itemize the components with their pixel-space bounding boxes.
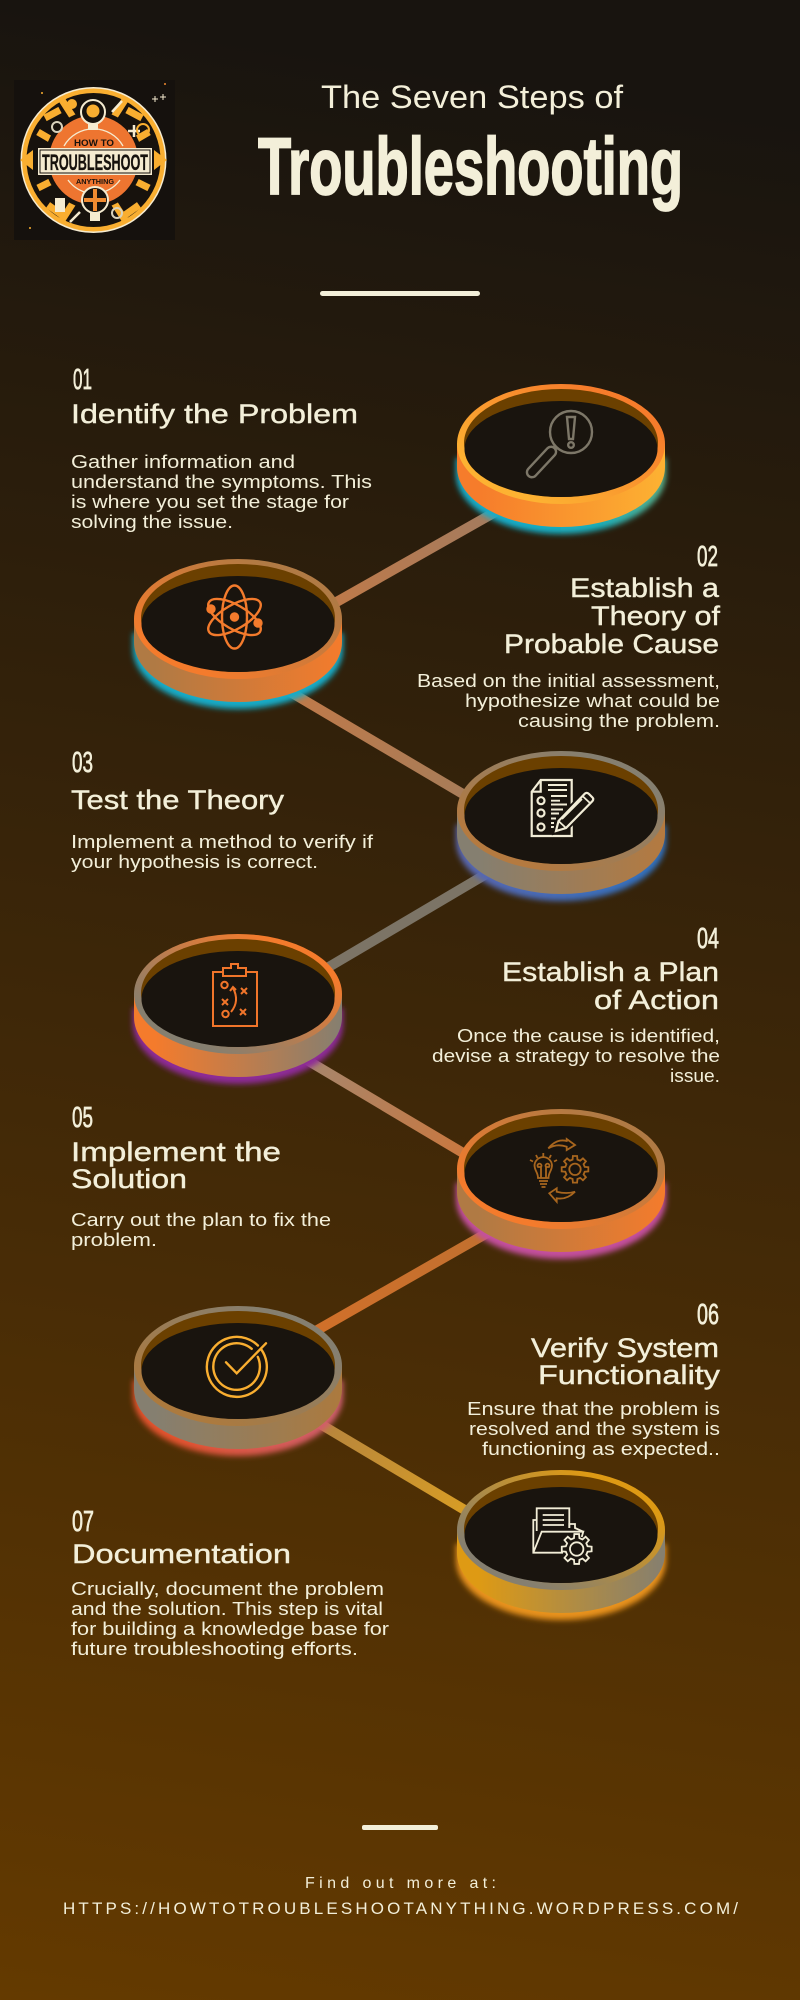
step heading: Establish a <box>570 573 720 603</box>
step description: is where you set the stage for <box>71 492 349 512</box>
step heading <box>531 1333 721 1390</box>
footer call to action <box>63 1875 738 1918</box>
step description <box>71 452 372 532</box>
step heading: Verify System <box>531 1333 719 1363</box>
connector lines between discs <box>270 498 520 1525</box>
step description <box>432 1026 720 1086</box>
icon: magnifying glass with exclamation mark <box>525 411 592 479</box>
disc 1 with magnifier icon <box>456 384 666 534</box>
step description: Carry out the plan to fix the <box>71 1210 331 1230</box>
step heading: Identify the Problem <box>71 399 358 429</box>
step heading: Theory of <box>591 601 721 631</box>
step description: Once the cause is identified, <box>457 1026 720 1046</box>
header divider bar <box>320 291 480 296</box>
step description: causing the problem. <box>518 711 720 731</box>
logo: How to Troubleshoot Anything badge: ANYTHING <box>76 179 115 186</box>
step heading <box>71 1137 281 1194</box>
step heading: of Action <box>594 985 719 1015</box>
footer url: HTTPS://HOWTOTROUBLESHOOTANYTHING.WORDPRESS.COM/ <box>63 1899 738 1918</box>
disc 7 with folder and gear icon <box>456 1470 666 1620</box>
step description: devise a strategy to resolve the <box>432 1046 720 1066</box>
step description: functioning as expected.. <box>482 1439 720 1459</box>
step 04 text <box>432 923 720 1086</box>
step heading <box>502 957 719 1015</box>
logo: How to Troubleshoot Anything badge: HOW TO <box>74 138 114 148</box>
step number: 01 <box>73 364 92 396</box>
step description: Implement a method to verify if <box>71 832 374 852</box>
step description: and the solution. This step is vital <box>71 1599 383 1619</box>
footer divider bar <box>362 1825 438 1830</box>
step description: your hypothesis is correct. <box>71 852 318 872</box>
step number: 02 <box>697 541 718 573</box>
step description: issue. <box>670 1066 720 1086</box>
step description: Ensure that the problem is <box>467 1399 720 1419</box>
step heading: Probable Cause <box>504 629 719 659</box>
step description <box>71 1210 331 1250</box>
step heading: Implement the <box>71 1137 281 1167</box>
step 01 text <box>71 364 372 532</box>
title <box>258 79 683 212</box>
step description <box>71 1579 389 1659</box>
step description <box>467 1399 720 1459</box>
step heading: Solution <box>71 1164 187 1194</box>
icon: folder with documents and gear <box>533 1508 592 1564</box>
step description: Crucially, document the problem <box>71 1579 384 1599</box>
step description: solving the issue. <box>71 512 233 532</box>
step description: future troubleshooting efforts. <box>71 1639 358 1659</box>
step 02 text <box>417 541 721 731</box>
step description: problem. <box>71 1230 157 1250</box>
step 06 text <box>467 1299 721 1459</box>
disc 5 with bulb and gear icon <box>456 1109 666 1259</box>
step 03 text <box>71 747 374 872</box>
step description: Gather information and <box>71 452 295 472</box>
icon: clipboard with strategy marks <box>213 964 257 1026</box>
step number: 07 <box>72 1506 94 1538</box>
step heading: Functionality <box>538 1360 721 1390</box>
step heading: Establish a Plan <box>502 957 719 987</box>
step description: Based on the initial assessment, <box>417 671 720 691</box>
step description <box>71 832 374 872</box>
icon: checklist and pencil <box>532 780 593 836</box>
footer label: Find out more at: <box>305 1875 496 1892</box>
step 07 text <box>71 1506 389 1659</box>
icon: atom <box>203 586 266 648</box>
disc 2 with atom icon <box>133 559 343 709</box>
step description: understand the symptoms. This <box>71 472 372 492</box>
step number: 03 <box>72 747 93 779</box>
logo: How to Troubleshoot Anything badge <box>14 80 175 240</box>
step description: hypothesize what could be <box>465 691 720 711</box>
disc 6 with circular checkmark icon <box>133 1306 343 1456</box>
step number: 06 <box>697 1299 719 1331</box>
step heading <box>504 573 721 659</box>
disc 3 with checklist icon <box>456 751 666 901</box>
step heading: Documentation <box>72 1539 291 1569</box>
step heading: Test the Theory <box>71 785 285 815</box>
logo: How to Troubleshoot Anything badge: TROUBLESHOOT <box>42 150 148 175</box>
step number: 04 <box>697 923 719 955</box>
step description: resolved and the system is <box>469 1419 720 1439</box>
icon: circular checkmark <box>207 1337 267 1397</box>
icon: light bulb, gear and cycle arrows <box>530 1139 588 1202</box>
step description: for building a knowledge base for <box>71 1619 389 1639</box>
disc 4 with clipboard plan icon <box>133 934 343 1084</box>
step 05 text <box>71 1102 331 1250</box>
step description <box>417 671 720 731</box>
title line: subtitle: The Seven Steps of <box>321 79 623 115</box>
step number: 05 <box>72 1102 93 1134</box>
